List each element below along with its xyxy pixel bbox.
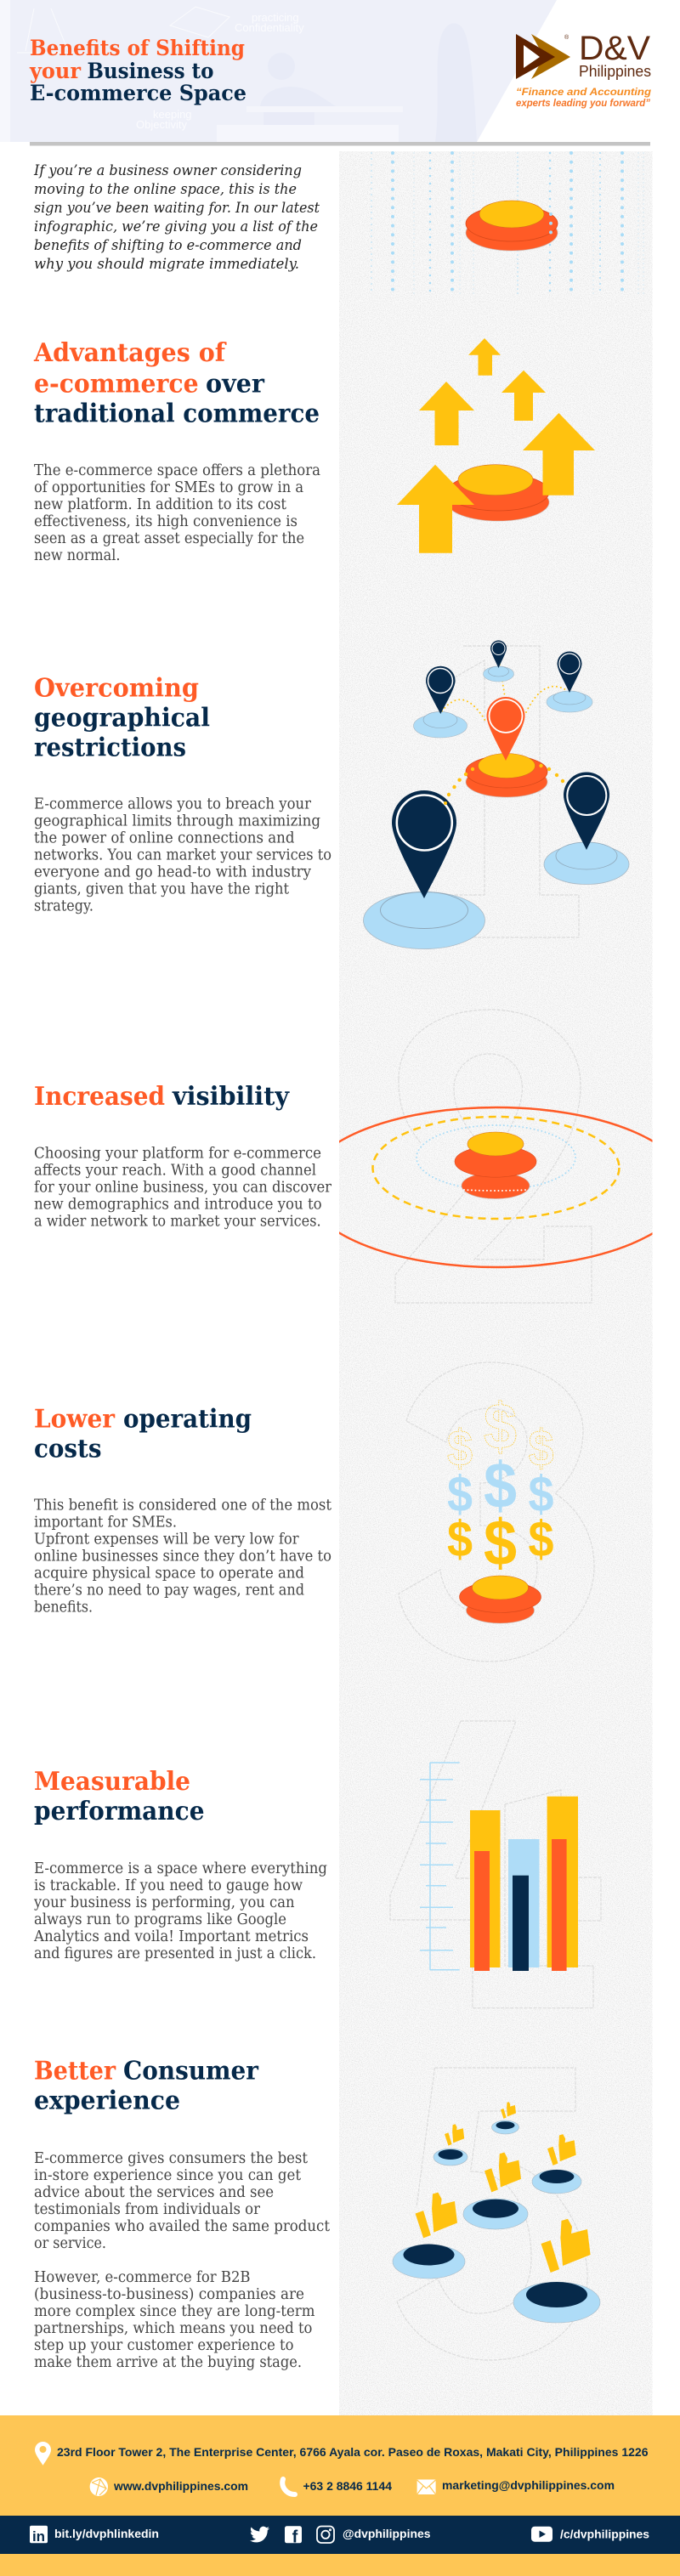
section 6 text: make them arrive at the buying stage. <box>34 2354 302 2371</box>
dollars: yellow row <box>447 1508 554 1579</box>
section 5 text: is trackable. If you need to gauge how <box>34 1877 303 1894</box>
title <box>29 36 246 105</box>
title: Business to <box>87 59 214 83</box>
thumb 1 and disc <box>491 2102 518 2134</box>
header banner <box>0 0 557 142</box>
social bar <box>0 2516 680 2554</box>
panel: illustrations background <box>339 151 653 2415</box>
section 5 text: always run to programs like Google <box>34 1911 286 1928</box>
section 3 text: a wider network to market your services. <box>34 1214 321 1231</box>
icon: mail <box>417 2480 436 2494</box>
ruler <box>420 1763 460 1970</box>
logo: D&V Philippines: “Finance and Accounting <box>516 88 651 98</box>
website: www.dvphilippines.com <box>113 2479 248 2493</box>
section 4 text: important for SMEs. <box>34 1514 177 1531</box>
icon: facebook <box>285 2526 302 2546</box>
section 6 text: in-store experience since you can get <box>34 2167 301 2184</box>
address: 23rd Floor Tower 2, The Enterprise Center, 6766 Ayala cor. Paseo de Roxas, Makati City, Philippines 1226 <box>57 2445 649 2459</box>
section 6 text: companies who availed the same product <box>34 2218 330 2235</box>
pin: right small <box>547 651 592 712</box>
dollars: dotted outline row: $ <box>529 1420 554 1476</box>
dollars: blue row <box>447 1450 554 1522</box>
section 1 heading: over <box>206 370 265 399</box>
section 2 text: geographical limits through maximizing <box>34 813 320 830</box>
logo: D&V Philippines: D&V <box>579 30 650 67</box>
section 2 text: strategy. <box>34 898 94 915</box>
dollars: yellow row: $ <box>447 1511 473 1567</box>
icon: linkedin: in <box>32 2528 45 2545</box>
section 3 text: for your online business, you can discover <box>34 1180 332 1197</box>
section 5 heading: Measurable <box>34 1767 190 1797</box>
section 2 text <box>34 796 332 915</box>
number 2 outline <box>395 1010 592 1303</box>
youtube handle: /c/dvphilippines <box>560 2528 649 2541</box>
section 1 heading: traditional commerce <box>34 399 320 429</box>
header banner: Objectivity <box>136 118 187 131</box>
section 6 text: However, e-commerce for B2B <box>34 2269 250 2286</box>
divider bar <box>30 142 650 146</box>
intro text: why you should migrate immediately. <box>34 256 299 273</box>
intro text: If you’re a business owner considering <box>33 162 302 179</box>
section 6 text: more complex since they are long-term <box>34 2303 315 2320</box>
dollars: blue row: $ <box>447 1466 473 1522</box>
icon: youtube <box>531 2527 552 2542</box>
header banner: Confidentiality <box>235 21 304 34</box>
section 1 text <box>34 462 320 564</box>
section 4 text: Upfront expenses will be very low for <box>34 1531 299 1548</box>
instagram handle: @dvphilippines <box>343 2527 431 2540</box>
section 3 heading: Increased <box>34 1082 165 1112</box>
section 6 text: advice about the services and see <box>34 2184 274 2201</box>
thumb 5 and disc <box>393 2193 465 2279</box>
icon: instagram <box>317 2526 334 2543</box>
dollars: dotted outline row: $ <box>484 1390 517 1464</box>
bar group 1 <box>470 1810 500 1971</box>
section 1 heading: e-commerce <box>34 370 199 399</box>
dollars: yellow row: $ <box>484 1508 517 1579</box>
section 3 heading <box>34 1082 290 1112</box>
header banner: keeping <box>153 108 192 121</box>
logo: D&V Philippines <box>516 30 651 109</box>
section 2 heading: restrictions <box>34 733 186 762</box>
section 1 text: new platform. In addition to its cost <box>34 496 286 513</box>
section 3 text: affects your reach. With a good channel <box>34 1163 316 1180</box>
section 2 text: everyone and go head-to with industry <box>34 864 311 881</box>
section 3 heading: visibility <box>172 1082 290 1112</box>
pin: right large <box>544 772 629 884</box>
section 5 text: your business is performing, you can <box>33 1894 294 1911</box>
section 5 text: Analytics and voila! Important metrics <box>33 1928 309 1945</box>
footer: contact band <box>0 2415 680 2576</box>
pin: left medium <box>413 666 468 738</box>
section 4 text: benefits. <box>34 1599 93 1616</box>
linkedin handle: bit.ly/dvphlinkedin <box>54 2527 159 2540</box>
section 2 text: giants, given that you have the right <box>34 881 289 898</box>
section 1 text: new normal. <box>34 547 121 564</box>
section 3 text: new demographics and introduce you to <box>34 1197 322 1214</box>
title: Benefits of Shifting <box>30 36 245 60</box>
title: E-commerce Space <box>30 81 246 105</box>
section 4 text: acquire physical space to operate and <box>34 1565 304 1582</box>
section 1 text: effectiveness, its high convenience is <box>34 513 298 530</box>
illustration: reach rings and button <box>339 1107 653 1268</box>
section 1 heading <box>33 338 320 429</box>
section 2 text: networks. You can market your services to <box>34 847 332 864</box>
intro text: sign you’ve been waiting for. In our latest <box>34 200 320 217</box>
number 3 outline <box>399 1362 594 1662</box>
section 4 text: online businesses since they don’t have to <box>34 1548 332 1565</box>
email: marketing@dvphilippines.com <box>442 2478 615 2492</box>
section 5 text: and figures are presented in just a click. <box>34 1945 316 1962</box>
icon: linkedin <box>30 2526 48 2545</box>
logo: D&V Philippines: experts leading you forward” <box>516 99 650 109</box>
section 6 heading: Consumer <box>123 2057 259 2086</box>
section 6 text: testimonials from individuals or <box>34 2201 261 2218</box>
section 6 heading <box>34 2057 259 2116</box>
illustration: rising arrows and button <box>397 338 595 553</box>
icon: facebook: f <box>292 2528 298 2546</box>
icon: globe <box>90 2477 108 2496</box>
logo: D&V Philippines: Philippines <box>579 63 651 80</box>
section 5 text: E-commerce is a space where everything <box>34 1860 327 1877</box>
section 1 text: seen as a great asset especially for the <box>34 530 304 547</box>
section 2 heading: Overcoming <box>34 673 199 703</box>
section 6 heading: Better <box>34 2057 116 2086</box>
section 4 text: This benefit is considered one of the most <box>34 1497 332 1514</box>
section 1 heading: Advantages of <box>33 338 227 368</box>
section 4 heading <box>34 1404 252 1464</box>
phone number: +63 2 8846 1144 <box>303 2479 392 2493</box>
bar group 2 <box>508 1839 539 1971</box>
section 6 text: E-commerce gives consumers the best <box>34 2150 308 2167</box>
button with orange pin <box>466 697 547 797</box>
section 4 heading: costs <box>34 1434 102 1464</box>
section 2 text: the power of online connections and <box>34 830 294 847</box>
illustration: thumbs up and buttons <box>393 2102 600 2323</box>
dollars: yellow row: $ <box>529 1511 554 1567</box>
thumb 4 and disc <box>463 2153 528 2229</box>
section 4 text: there’s no need to pay wages, rent and <box>34 1582 304 1599</box>
intro text: benefits of shifting to e-commerce and <box>34 237 302 254</box>
section 6 text: partnerships, which means you need to <box>34 2320 312 2337</box>
intro text: moving to the online space, this is the <box>34 181 297 198</box>
number 4 outline <box>390 1721 601 2008</box>
section 2 text: E-commerce allows you to breach your <box>34 796 312 813</box>
section 4 heading: operating <box>123 1404 252 1434</box>
thumb 6 and disc <box>513 2219 600 2323</box>
icon: location pin <box>35 2442 51 2466</box>
title: your <box>29 59 82 83</box>
bar chart with ruler <box>420 1763 578 1971</box>
header banner: practicing <box>252 11 299 24</box>
section 6 text <box>34 2150 330 2371</box>
section 6 heading: experience <box>34 2086 180 2116</box>
section 4 heading: Lower <box>34 1404 116 1434</box>
icon: twitter <box>250 2527 269 2542</box>
section 3 text <box>34 1146 332 1231</box>
button <box>459 1576 541 1623</box>
section 4 text <box>34 1497 332 1616</box>
section 3 text: Choosing your platform for e-commerce <box>34 1146 321 1163</box>
logo: D&V Philippines: ® <box>564 34 570 41</box>
illustration: dollar signs and button <box>447 1390 554 1623</box>
section 5 text <box>33 1860 327 1962</box>
pin: left large <box>364 790 484 948</box>
illustration: data streams and button <box>371 153 643 297</box>
section 2 heading: geographical <box>34 703 210 733</box>
section 6 text: (business-to-business) companies are <box>34 2286 304 2303</box>
number 1 outline <box>455 646 579 937</box>
section 1 text: of opportunities for SMEs to grow in a <box>34 479 303 496</box>
thumb 3 and disc <box>532 2134 581 2194</box>
dollars: blue row: $ <box>484 1450 517 1522</box>
intro text <box>33 162 320 273</box>
section 5 heading: performance <box>34 1797 204 1826</box>
section 6 text: or service. <box>34 2235 106 2252</box>
section 6 text: step up your customer experience to <box>34 2337 294 2354</box>
connector dots <box>447 764 564 796</box>
dollars: blue row: $ <box>529 1466 554 1522</box>
illustration: map pins connected to button <box>364 641 629 948</box>
icon: phone <box>282 2479 295 2494</box>
section 1 text: The e-commerce space offers a plethora <box>34 462 320 479</box>
section 2 heading <box>34 673 210 762</box>
bar group 3 <box>547 1797 578 1971</box>
dollars: dotted outline row: $ <box>447 1420 473 1476</box>
dollars: dotted outline row <box>447 1390 554 1476</box>
intro text: infographic, we’re giving you a list of the <box>34 218 318 235</box>
pin: top small <box>483 641 513 682</box>
number 5 outline <box>397 2068 587 2360</box>
section 5 heading <box>34 1767 204 1826</box>
thumb 2 and disc <box>434 2124 468 2166</box>
